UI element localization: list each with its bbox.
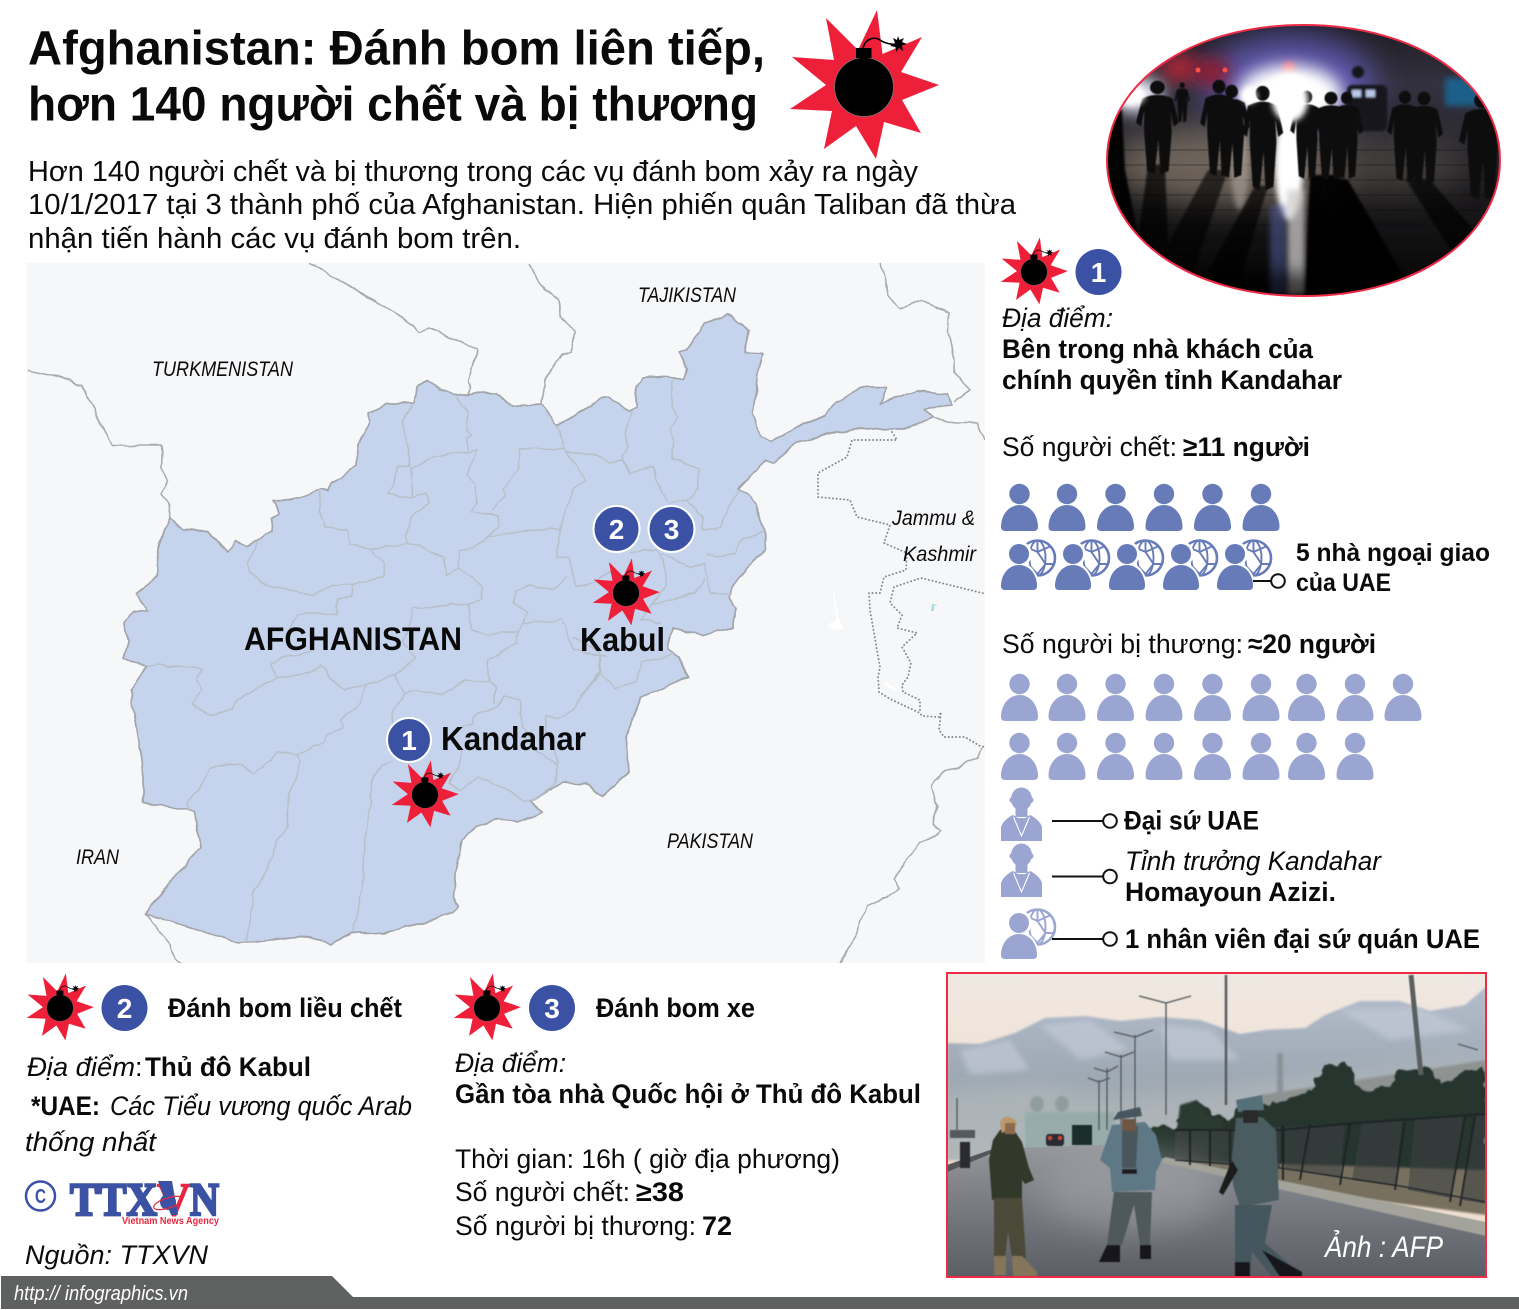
panel: attack 2 header: Đánh bom liều chết (168, 993, 402, 1023)
text: attack 1 location: chính quyền tỉnh Kandahar (1002, 365, 1342, 395)
title: Afghanistan: Đánh bom liên tiếp, (28, 22, 765, 76)
title (28, 22, 765, 132)
title: hơn 140 người chết và bị thương (28, 78, 758, 132)
text: attack 3 details: 72 (702, 1211, 732, 1241)
trees (1140, 1062, 1486, 1185)
marker: number 2: 2 (609, 514, 624, 545)
credit text: Ảnh : AFP (1323, 1230, 1443, 1264)
policeman right (1219, 1095, 1302, 1277)
text: attack 1 deaths (1002, 432, 1310, 462)
light streak (1275, 110, 1303, 220)
panel: attack 1 header: 1 (1091, 257, 1106, 288)
text: diplomats label: 5 nhà ngoại giao (1296, 539, 1490, 567)
road light (1110, 125, 1360, 205)
text: attack 2 details: : (135, 1052, 143, 1082)
logo: TTXVN: V (157, 1174, 191, 1226)
text: attack 2 details: *UAE: (31, 1091, 100, 1121)
text: attack 2 details: Thủ đô Kabul (145, 1052, 311, 1082)
fence panels (1175, 1114, 1486, 1204)
label: Afghanistan: AFGHANISTAN (244, 621, 462, 657)
central headlight (1238, 65, 1342, 125)
distant buildings (1024, 1112, 1116, 1148)
text: attack 2 details: Địa điểm (27, 1052, 135, 1082)
logo: TTXVN (26, 1174, 219, 1227)
label: Kabul: Kabul (580, 621, 665, 658)
label: Kandahar: Kandahar (441, 720, 586, 757)
panel: attack 3 header: 3 (544, 993, 560, 1024)
kerb (1160, 1157, 1486, 1236)
panel: attack 1 header (1001, 237, 1122, 304)
marker: number 1 (387, 718, 431, 762)
text: attack 1 location (1002, 303, 1342, 395)
panel: attack 3 header (454, 973, 755, 1040)
source: Nguồn: TTXVN (25, 1240, 208, 1270)
text: attack 1 deaths: ≥11 người (1183, 432, 1310, 462)
icons: five diplomats (998, 540, 1271, 592)
marker: Kandahar bomb (392, 760, 459, 827)
photo: night silhouettes (1106, 24, 1501, 297)
text: attack 1 injured (1002, 629, 1376, 659)
marker: number 3 (648, 506, 694, 552)
shadows (1100, 110, 1500, 296)
text: diplomats label (1296, 539, 1490, 597)
text: attack 1 location: Bên trong nhà khách của (1002, 334, 1314, 364)
panel: attack 3 header: Đánh bom xe (596, 993, 755, 1023)
row: Kandahar governor: Tỉnh trưởng Kandahar (1125, 846, 1382, 876)
logo: TTXVN: Vietnam News Agency (122, 1216, 219, 1227)
text: attack 3 details (455, 1048, 921, 1241)
row: UAE ambassador: Đại sứ UAE (1124, 806, 1259, 836)
street lamps (957, 975, 1478, 1130)
text: attack 1 injured: Số người bị thương: (1002, 629, 1243, 659)
row: embassy staff (998, 910, 1480, 961)
bottom vignette (1266, 262, 1307, 295)
lakes (828, 590, 843, 630)
text: attack 1 location: Địa điểm: (1002, 303, 1113, 333)
verge (1187, 1161, 1485, 1216)
text: attack 2 details (25, 1052, 412, 1157)
intro text: Hơn 140 người chết và bị thương trong các vụ đánh bom xảy ra ngày (28, 156, 918, 188)
bloom over figures (1272, 78, 1308, 122)
headlight left (1111, 77, 1163, 113)
text: attack 3 details: Gần tòa nhà Quốc hội ở Thủ đô Kabul (455, 1079, 921, 1109)
text: attack 3 details: Thời gian: 16h ( giờ địa phương) (455, 1144, 840, 1174)
text: attack 3 details: Số người bị thương: (455, 1211, 696, 1241)
connector: diplomats (1253, 574, 1285, 588)
text: diplomats label: của UAE (1296, 569, 1391, 597)
country labels: Kashmir (903, 543, 977, 566)
country labels: TAJIKISTAN (638, 284, 737, 307)
logo: TTXVN: N (190, 1174, 219, 1226)
text: attack 2 details: thống nhất (25, 1127, 158, 1157)
icon: large bomb explosion (790, 10, 939, 159)
country labels: IRAN (76, 846, 120, 869)
snow streaks (960, 1008, 1470, 1075)
row: Kandahar governor (1001, 844, 1382, 907)
text: attack 1 deaths: Số người chết: (1002, 432, 1177, 462)
silhouettes (1136, 80, 1505, 199)
Afghanistan shape with provinces (123, 314, 953, 944)
text: attack 3 details: ≥38 (636, 1177, 684, 1207)
row: embassy staff: 1 nhân viên đại sứ quán UAE (1125, 924, 1480, 954)
fence lines (1175, 1114, 1486, 1206)
footer bar: http:// infographics.vn (14, 1283, 188, 1305)
armoured vehicle (1347, 66, 1387, 131)
road (947, 1145, 1486, 1277)
marker: number 1: 1 (401, 725, 417, 756)
footer bar (1, 1276, 1519, 1309)
marker: Kabul bomb (593, 558, 660, 625)
text: attack 3 details: Địa điểm: (455, 1048, 566, 1078)
text: attack 1 injured: ≈20 người (1248, 629, 1376, 659)
row: UAE ambassador (1001, 788, 1259, 841)
panel: attack 2 header (27, 973, 402, 1040)
logo: TTXVN: TTX (70, 1174, 157, 1226)
country labels (76, 284, 977, 869)
country labels: TURKMENISTAN (152, 358, 294, 381)
vehicles (950, 1125, 1092, 1168)
row: Kandahar governor: Homayoun Azizi. (1125, 877, 1336, 907)
panel: attack 2 header: 2 (117, 993, 132, 1024)
disputed dotted borders (818, 432, 990, 748)
text: attack 3 details: Số người chết: (455, 1177, 630, 1207)
text: attack 2 details: Các Tiểu vương quốc Arab (110, 1091, 412, 1121)
photo: police on road (947, 973, 1486, 1277)
policeman centre (1099, 1107, 1162, 1262)
intro text: nhận tiến hành các vụ đánh bom trên. (28, 223, 521, 255)
marker: number 2 (594, 506, 640, 552)
intro text (28, 156, 1017, 255)
country labels: Jammu & (891, 507, 975, 530)
intro text: 10/1/2017 tại 3 thành phố của Afghanistan. Hiện phiến quân Taliban đã thừa (28, 189, 1017, 221)
soldier left (989, 1117, 1037, 1276)
neighbouring borders (27, 263, 985, 964)
marker: number 3: 3 (664, 514, 679, 545)
icons: six dead people (1001, 484, 1280, 531)
logo: TTXVN: C (35, 1186, 46, 1208)
icons: injured people (1001, 674, 1422, 780)
map panel (27, 263, 990, 964)
country labels: PAKISTAN (667, 830, 754, 853)
